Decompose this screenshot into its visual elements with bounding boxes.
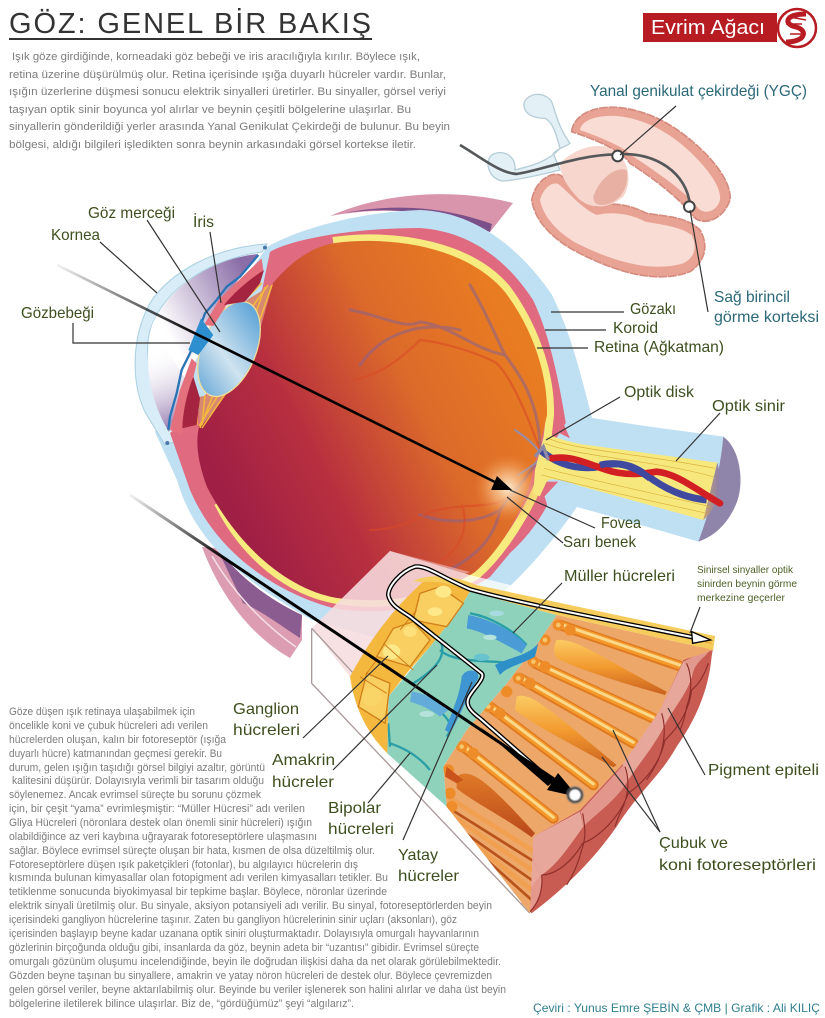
nerve end cap [698, 437, 741, 542]
label: Yatay hücreler: hücreler [398, 868, 460, 885]
anterior chamber [148, 254, 258, 432]
thalamus [560, 146, 628, 207]
ventricles [488, 94, 570, 181]
ganglion cell layer [350, 580, 470, 753]
brain [460, 94, 730, 277]
label: neural signal note: sinirden beynin görme [697, 578, 797, 590]
icon: Müller cells [467, 615, 527, 653]
label: Çubuk ve koni fotoreseptörleri [659, 835, 816, 874]
upper eyelid [330, 194, 513, 232]
label: Ganglion hücreleri: Ganglion [233, 701, 299, 718]
node: visual cortex [684, 201, 695, 212]
label: Sağ birincil görme korteksi [714, 289, 819, 326]
lens (Göz merceği) [185, 293, 273, 405]
body text block: kalitesini düşürür. Dolayısıyla verimli bir tasarım olduğu [12, 775, 264, 787]
title: GÖZ: GENEL BİR BAKIŞ [9, 7, 371, 40]
choroid [170, 228, 568, 611]
body text block [9, 706, 506, 1010]
label: Yanal genikulat çekirdeği: Yanal genikulat çekirdeği (YGÇ) [590, 83, 807, 100]
body text block: için, bir çeşit “yama” evrimleşmiştir: “Müller Hücresi” adı verilen [9, 803, 305, 815]
logo: Evrim Ağacı [643, 9, 816, 47]
body text block: elektrik sinyali üretilmiş olur. Bu sinyale, aksiyon potansiyeli adı verilir. Bu sinyal, fotoreseptörlerden beyin [9, 900, 492, 912]
intro text block: bölgesi, aldığı bilgileri işledikten sonra beynin arkasındaki görsel kortekse iletir. [9, 139, 416, 151]
label: Sağ birincil görme korteksi: görme korteksi [714, 309, 819, 326]
node: LGN [612, 151, 623, 161]
cutaway plane [312, 551, 715, 913]
right lobe upper [572, 107, 730, 221]
label: Optik sinir: Optik sinir [712, 398, 786, 415]
nerve sheath [537, 413, 737, 542]
label: Amakrin hücreler: Amakrin [272, 752, 335, 769]
inner chamber [197, 241, 547, 600]
label: Kornea: Kornea [51, 227, 100, 244]
label: Ganglion hücreleri [233, 701, 300, 739]
intro text block: Işık göze girdiğinde, korneadaki göz bebeği ve iris aracılığıyla kırılır. Böylece ışık, [12, 51, 420, 63]
body text block: gelen görsel veriler, beyne aktarılabilmiş olur. Beyinde bu veriler işlenerek son halini alırlar ve daha üst beyin [9, 984, 506, 996]
photoreceptor layer [443, 615, 713, 913]
retina cross-section block [312, 567, 715, 913]
label: Sarı benek: Sarı benek [563, 534, 637, 551]
body text block: Fotoreseptörlere düşen ışık paketçikleri (fotonlar), bu algılayıcı hücrelerin dış [9, 859, 358, 871]
body text block: kısmında bulunan kimyasallar olan fotopigment adı verilen kimyasalları tetikler. Bu [9, 872, 388, 884]
body text block: tetiklenme sonucunda biyokimyasal bir tepkime başlar. Böylece, nöronlar üzerinde [9, 886, 387, 898]
bipolar / Müller teal layer [387, 592, 557, 807]
label: neural signal note [697, 564, 797, 604]
label: Pigment epiteli: Pigment epiteli [708, 762, 819, 779]
label: Gözbebeği: Gözbebeği [21, 305, 94, 322]
label: Yatay hücreler [398, 847, 460, 885]
label: Retina (Ağkatman): Retina (Ağkatman) [594, 339, 724, 356]
cornea [135, 244, 267, 445]
visual pathway [460, 145, 690, 205]
nerve fibre bundle [533, 432, 717, 520]
logo: Evrim Ağacı: Evrim Ağacı [651, 17, 765, 39]
label: Fovea: Fovea [601, 515, 641, 532]
vessels [540, 450, 707, 500]
label: neural signal note: merkezine geçerler [697, 592, 785, 604]
signal path arrow [388, 567, 711, 788]
label: Müller hücreleri: Müller hücreleri [564, 568, 675, 585]
body text block: Göze düşen ışık retinaya ulaşabilmek için [9, 706, 195, 718]
body text block: Gözden beyne taşınan bu sinyallere, amakrin ve yatay nöron hücreleri de destek olur. Böylece çevremizden [9, 970, 492, 982]
body text block: Gliya Hücreleri (nöronlara destek olan önemli sinir hücreleri) ışığın [9, 817, 312, 829]
intro text block [9, 51, 450, 151]
credits footer: Çeviri : Yunus Emre ŞEBİN & ÇMB | Grafik : Ali KILIÇ [533, 1001, 820, 1015]
label: Optik disk: Optik disk [624, 384, 695, 401]
iris details [165, 246, 267, 445]
label: Bipolar hücreleri: Bipolar [328, 800, 382, 817]
label: Sağ birincil görme korteksi: Sağ birincil [714, 289, 790, 306]
body text block: gözlerinin birçoğunda olduğu gibi, insanlarda da göz, beynin adeta bir “uzantısı” gibidir. Evrimsel süreçte [9, 942, 479, 954]
pigment epithelium [522, 636, 715, 913]
label: Amakrin hücreler: hücreler [272, 774, 335, 791]
body text block: öncelikle koni ve çubuk hücreleri adı verilen [9, 720, 208, 732]
body text block: söylenemez. Ancak evrimsel süreçte bu sorunu çözmek [9, 789, 261, 801]
eyeball [135, 210, 725, 650]
label: Koroid: Koroid [613, 320, 658, 337]
label: Ganglion hücreleri: hücreleri [233, 722, 300, 739]
zonule fibres [240, 284, 273, 330]
body text block: olabildiğince az veri kaybına uğrayarak fotoreseptörlere ulaşmasını [9, 831, 317, 843]
choroid gap edges [535, 482, 558, 507]
light ray arrow to photoreceptors [130, 495, 585, 805]
retinal vessels [350, 285, 548, 572]
label: Çubuk ve koni fotoreseptörleri: koni fotoreseptörleri [659, 857, 816, 874]
intro text block: sinyallerin gönderildiği yerler arasında Yanal Genikulat Çekirdeği de bulunur. Bu beyin [9, 121, 450, 133]
label: Bipolar hücreleri [328, 800, 394, 838]
label: Gözakı: Gözakı [630, 301, 676, 318]
body text block: içerisindeki gangliyon hücrelerine taşınır. Zaten bu gangliyon hücrelerinin sinir uçları (aksonları), göz [9, 914, 457, 926]
icon: rods and cones [445, 624, 682, 900]
label: Yatay hücreler: Yatay [398, 847, 438, 864]
body text block: sağlar. Böylece evrimsel süreçte oluşan bir hata, kısmen de olsa düzeltilmiş olur. [9, 845, 375, 857]
label: Amakrin hücreler [272, 752, 335, 791]
body text block: içerisinden başlayıp beyne kadar uzanana optik siniri oluşturmaktadır. Dolayısıyla omurgalı hayvanlarının [9, 928, 479, 940]
label: Çubuk ve koni fotoreseptörleri: Çubuk ve [659, 835, 728, 852]
label: neural signal note: Sinirsel sinyaller optik [697, 564, 794, 576]
leader lines [73, 106, 720, 840]
intro text block: retina üzerine düşürülmüş olur. Retina içerisinde ışığa duyarlı hücreler vardır. Bunlar, [9, 69, 446, 81]
label: Göz merceği: Göz merceği [88, 205, 175, 222]
lobe lower [532, 174, 705, 277]
label: İris: İris [193, 212, 214, 231]
retina (yellow layer) [218, 238, 550, 603]
body text block: omurgalı gözünüm oluşumu incelendiğinde, beyin ile doğrudan ilişkisi daha da net olarak görülebilmektedir. [9, 956, 501, 968]
body text block: duyarlı hücre) katmanından geçmesi gerekir. Bu [9, 748, 222, 760]
optic nerve [533, 413, 741, 542]
intro text block: taşıyan optik sinir boyunca yol alırlar ve beynin çeşitli bölgelerine ulaşırlar. Bu [9, 104, 411, 116]
sclera (Gözakı) [155, 210, 725, 650]
body text block: bölgelerine iletilerek bilince ulaşırlar. Biz de, “gördüğümüz” şeyi “algılarız”. [9, 998, 354, 1010]
body text block: durum, gelen ışığın taşıdığı görsel bilgiyi azaltır, görüntü [9, 762, 265, 774]
body text block: hücrelerden oluşan, kalın bir fotoreseptör (ışığa [9, 734, 227, 746]
nerve fibre band [413, 576, 715, 650]
label: Bipolar hücreleri: hücreleri [328, 821, 394, 838]
light ray arrow to fovea [57, 265, 512, 490]
lower eyelid [202, 547, 302, 658]
macula glow (Sarı benek) [474, 454, 542, 522]
box outline [312, 628, 530, 913]
intro text block: ışığın üzerlerine düşmesi sonucu elektrik sinyalleri üretirler. Bu sinyaller, görsel veriyi [9, 86, 446, 98]
